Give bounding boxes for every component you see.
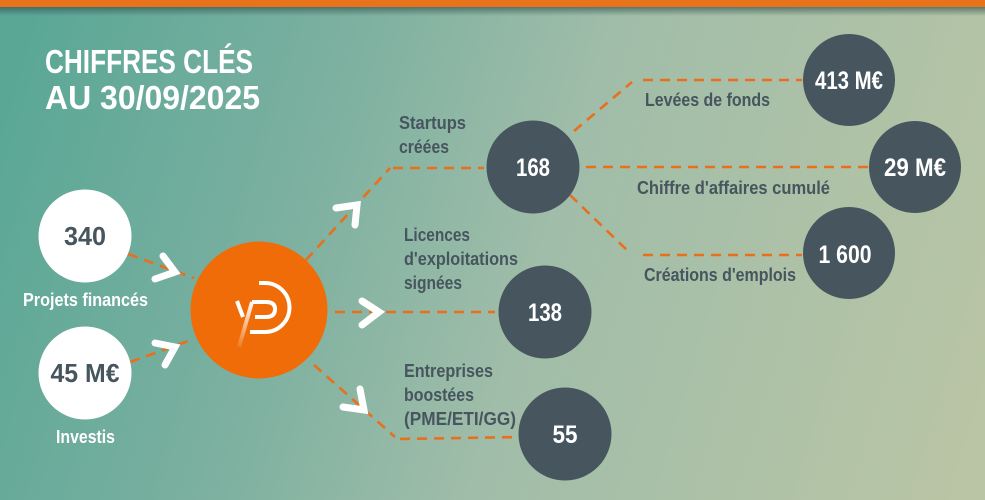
connector: centre to entreprises xyxy=(314,365,522,439)
title xyxy=(45,43,260,116)
label: licences: signées xyxy=(404,273,462,293)
label: entreprises: (PME/ETI/GG) xyxy=(404,409,516,429)
label: entreprises: Entreprises xyxy=(404,361,493,381)
label: entreprises xyxy=(404,361,516,429)
central logo circle xyxy=(190,242,328,378)
circle: 168 xyxy=(486,120,580,214)
circle: 1 600: 1 600 xyxy=(818,241,872,269)
circle: 45 M€ xyxy=(38,326,132,420)
circle: 138 xyxy=(498,266,592,358)
arrow: projets xyxy=(155,256,175,279)
circle: 45 M€: 45 M€ xyxy=(50,358,120,388)
circle: 29 M€ xyxy=(869,121,961,213)
circle: 1 600 xyxy=(803,207,895,299)
label: projets financés: Projets financés xyxy=(23,290,148,310)
connector: centre to licences xyxy=(335,311,495,313)
label: créations d'emplois: Créations d'emplois xyxy=(644,265,796,285)
connector: startups to créations xyxy=(570,195,802,255)
top bar xyxy=(0,0,985,16)
arrow: investis xyxy=(155,343,175,365)
label: licences: d'exploitations xyxy=(404,249,518,269)
circle: 55: 55 xyxy=(552,421,578,449)
label: chiffre d'affaires: Chiffre d'affaires cumulé xyxy=(637,178,830,198)
title: AU 30/09/2025 xyxy=(45,79,260,116)
title: CHIFFRES CLÉS xyxy=(45,43,253,80)
circle: 340 projets: 340 xyxy=(64,221,106,251)
arrow: entreprises xyxy=(343,389,364,410)
label: levées de fonds: Levées de fonds xyxy=(645,90,770,110)
label: entreprises: boostées xyxy=(404,385,474,405)
circle: 413 M€: 413 M€ xyxy=(815,67,883,95)
circle: 413 M€ xyxy=(803,34,895,126)
circle: 29 M€: 29 M€ xyxy=(884,154,946,182)
connector: projets to centre xyxy=(128,254,194,278)
circle: 55 xyxy=(518,388,612,480)
connector: startups to chiffre d'affaires xyxy=(586,166,868,168)
icon: VP logo xyxy=(237,283,289,347)
label: licences xyxy=(404,225,518,293)
circle: 340 projets xyxy=(38,190,132,282)
label: startups créées xyxy=(399,113,466,157)
connector: startups to levées xyxy=(574,80,802,131)
label: licences: Licences xyxy=(404,225,470,245)
connector: investis to centre xyxy=(130,339,194,362)
label: investis: Investis xyxy=(56,427,115,447)
circle: 138: 138 xyxy=(528,299,562,327)
arrow: licences xyxy=(362,301,379,325)
connector: centre to startups xyxy=(306,168,484,260)
label: startups créées: Startups xyxy=(399,113,466,133)
arrow: startups xyxy=(336,205,357,225)
circle: 168: 168 xyxy=(516,154,550,182)
label: startups créées: créées xyxy=(399,137,449,157)
